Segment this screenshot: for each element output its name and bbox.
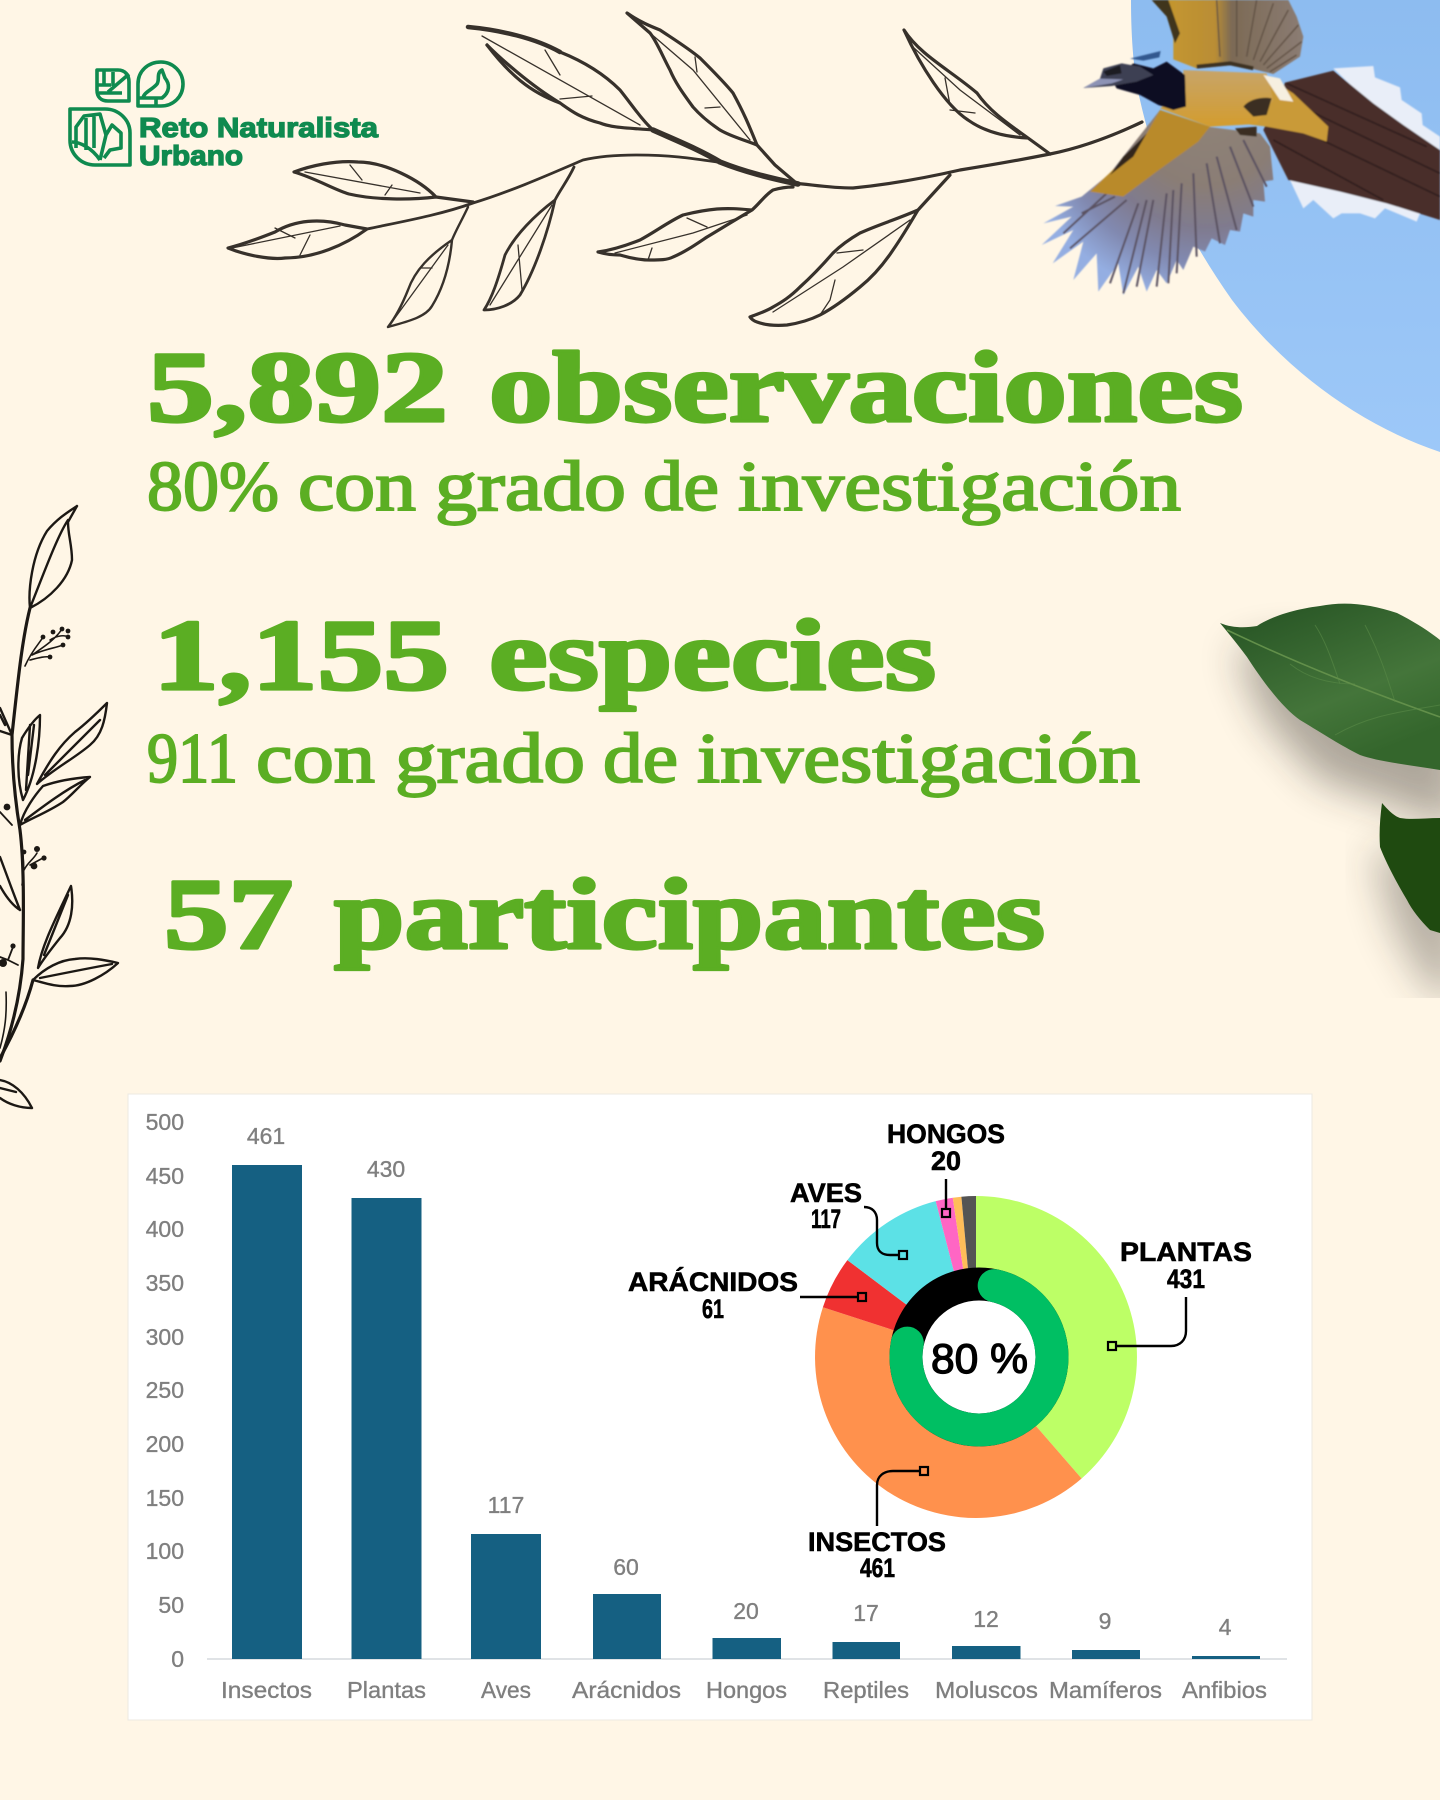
subheadline: species research grade: con <box>256 720 375 798</box>
callout: Hongos: 20 <box>931 1146 961 1176</box>
subheadline: observations research grade: grado <box>435 448 626 526</box>
subheadline: species research grade: investigación <box>697 720 1140 798</box>
bird feet <box>1235 98 1272 137</box>
leaf: lower <box>1380 803 1440 933</box>
bar value labels <box>247 1123 1232 1640</box>
headline: species <box>153 599 936 711</box>
callout: Plantas: 431 <box>1167 1264 1205 1294</box>
callout: Aves: AVES <box>790 1178 862 1208</box>
subheadline: observations research grade: 80% <box>147 448 279 526</box>
bar value labels: 17 <box>853 1600 879 1626</box>
y axis labels: 500 <box>146 1109 184 1135</box>
illustration: left plant sprig <box>0 506 118 1108</box>
subheadline: species research grade: de <box>603 720 678 798</box>
callout: Arácnidos <box>628 1266 866 1324</box>
bar value labels: 117 <box>488 1492 524 1518</box>
logo wordmark: Reto Naturalista <box>139 112 378 143</box>
y axis labels: 400 <box>146 1216 184 1242</box>
category labels: Hongos <box>706 1677 787 1703</box>
callout: Hongos <box>887 1119 1005 1217</box>
bar value labels: 12 <box>973 1606 999 1632</box>
center percentage: 80 % <box>931 1335 1028 1382</box>
bar value labels: 461 <box>247 1123 285 1149</box>
category labels: Arácnidos <box>572 1677 681 1703</box>
logo icon: leaf <box>97 70 129 101</box>
subheadline: species research grade <box>147 720 1140 798</box>
y axis labels: 100 <box>146 1538 184 1564</box>
research grade ring <box>906 1284 1052 1430</box>
subheadline: observations research grade: con <box>298 448 416 526</box>
y axis labels: 150 <box>146 1485 184 1511</box>
bar value labels: 4 <box>1219 1614 1232 1640</box>
y axis labels: 250 <box>146 1377 184 1403</box>
bird upper wing <box>1152 0 1303 74</box>
headline: observations: 5,892 <box>147 331 448 443</box>
logo wordmark: Urbano <box>139 140 243 171</box>
blue sky shape <box>1131 0 1440 452</box>
chart panel <box>128 1094 1312 1720</box>
y axis labels: 50 <box>158 1592 184 1618</box>
subheadline: observations research grade: investigación <box>738 448 1181 526</box>
illustration: green leaves with shadows <box>1220 604 1440 1000</box>
subheadline: observations research grade <box>147 448 1181 526</box>
callout: Insectos <box>808 1467 946 1583</box>
bird head and neck <box>1083 51 1186 110</box>
bars <box>232 1165 1260 1659</box>
y axis labels: 200 <box>146 1431 184 1457</box>
headline: species: 1,155 <box>153 599 449 711</box>
bar value labels: 20 <box>733 1598 759 1624</box>
callout: Hongos: HONGOS <box>887 1119 1005 1149</box>
headline: observations: observaciones <box>489 331 1243 443</box>
subheadline: species research grade: grado <box>395 720 585 798</box>
callout: Insectos: 461 <box>860 1553 895 1583</box>
subheadline: observations research grade: de <box>643 448 719 526</box>
bird highlight <box>1263 75 1293 102</box>
logo: Reto Naturalista Urbano <box>70 62 378 171</box>
callout: Aves <box>790 1178 907 1259</box>
callout: Plantas <box>1108 1237 1252 1350</box>
category labels: Mamíferos <box>1049 1677 1162 1703</box>
category labels: Reptiles <box>823 1677 909 1703</box>
category labels: Anfibios <box>1182 1677 1267 1703</box>
category labels <box>221 1677 1267 1703</box>
category labels: Insectos <box>221 1677 312 1703</box>
category labels: Aves <box>481 1677 531 1703</box>
bird photo illustration <box>1042 0 1440 295</box>
pie slices <box>815 1196 1137 1518</box>
headline: participants: participantes <box>334 858 1045 970</box>
y axis labels: 300 <box>146 1324 184 1350</box>
headline: participants <box>164 858 1045 970</box>
callout: Arácnidos: ARÁCNIDOS <box>628 1266 798 1297</box>
leaf: upper <box>1220 604 1440 770</box>
bird body <box>1160 70 1273 127</box>
y axis labels <box>146 1109 184 1672</box>
bar value labels: 9 <box>1099 1608 1111 1634</box>
logo wordmark <box>139 112 378 171</box>
bird rump <box>1240 76 1328 142</box>
headline: participants: 57 <box>164 858 293 970</box>
callout: Plantas: PLANTAS <box>1120 1237 1252 1267</box>
axis line <box>207 1658 1287 1660</box>
headline: species: especies <box>489 599 936 711</box>
bird lower wing <box>1042 110 1273 295</box>
y axis labels: 450 <box>146 1163 184 1189</box>
y axis labels: 0 <box>171 1646 184 1672</box>
bar value labels: 60 <box>613 1554 639 1580</box>
category labels: Moluscos <box>935 1677 1038 1703</box>
y axis labels: 350 <box>146 1270 184 1296</box>
callout: Aves: 117 <box>811 1204 841 1234</box>
logo icon: city <box>70 109 130 165</box>
donut chart: taxa and research grade <box>628 1119 1252 1583</box>
headline: observations <box>147 331 1243 443</box>
category labels: Plantas <box>347 1677 426 1703</box>
illustration: leafy branch <box>228 13 1142 327</box>
bird tail <box>1263 66 1440 222</box>
bar value labels: 430 <box>367 1156 405 1182</box>
subheadline: species research grade: 911 <box>147 720 238 798</box>
callout: Arácnidos: 61 <box>702 1294 724 1324</box>
logo icon: bird <box>138 62 183 106</box>
callout: Insectos: INSECTOS <box>808 1527 946 1557</box>
